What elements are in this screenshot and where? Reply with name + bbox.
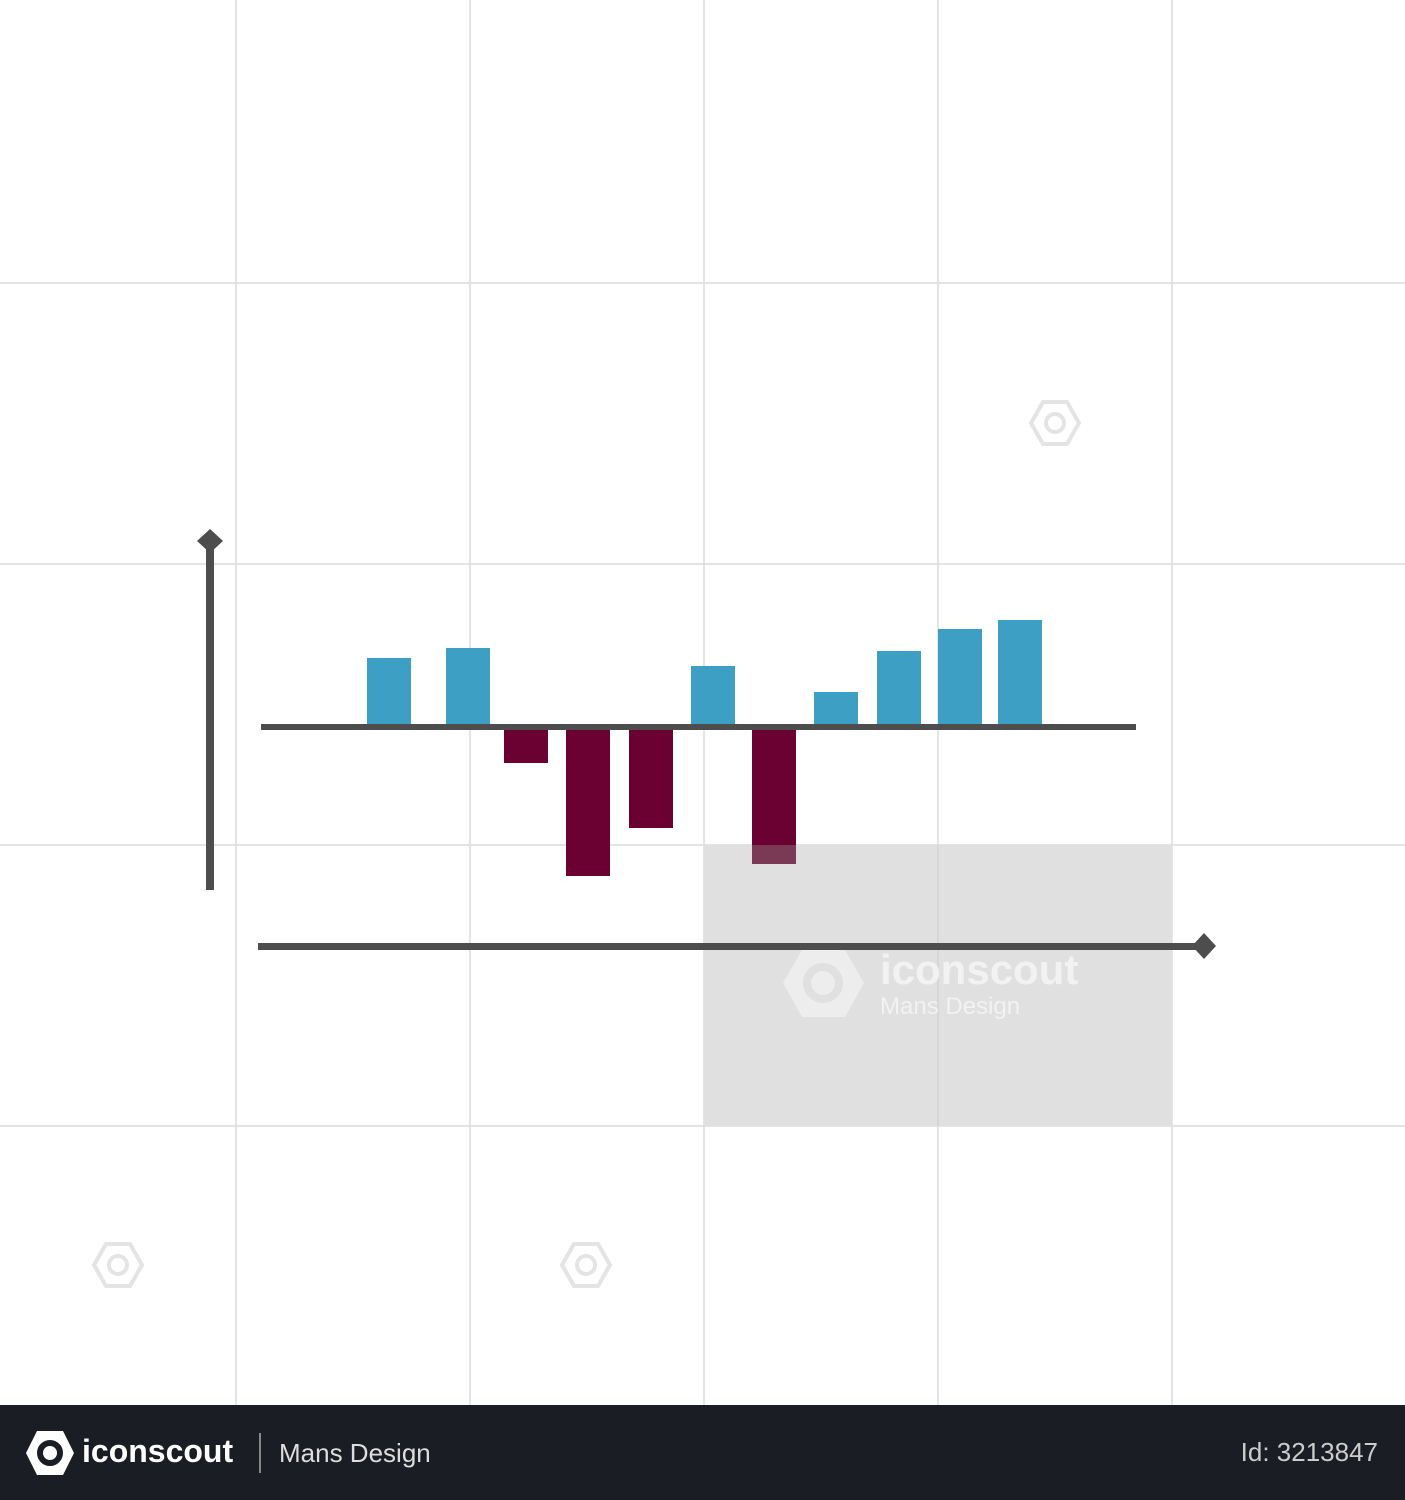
watermark panel: [704, 845, 1172, 1126]
footer brand: iconscout: [82, 1433, 233, 1469]
small watermark icons: [94, 402, 1079, 1286]
footer author: Mans Design: [279, 1438, 431, 1468]
watermark logo: [783, 946, 1078, 1020]
footer logo icon: [26, 1431, 74, 1475]
y axis arrow: [197, 529, 223, 890]
x axis arrow: [258, 933, 1216, 959]
watermark logo: Mans Design: [880, 993, 1020, 1020]
baseline: [261, 724, 1136, 730]
footer bar: [0, 1405, 1405, 1500]
footer id: Id: 3213847: [1241, 1437, 1378, 1467]
positive bars: [367, 620, 1042, 725]
negative bars: [504, 729, 796, 876]
watermark logo: iconscout: [880, 946, 1078, 993]
